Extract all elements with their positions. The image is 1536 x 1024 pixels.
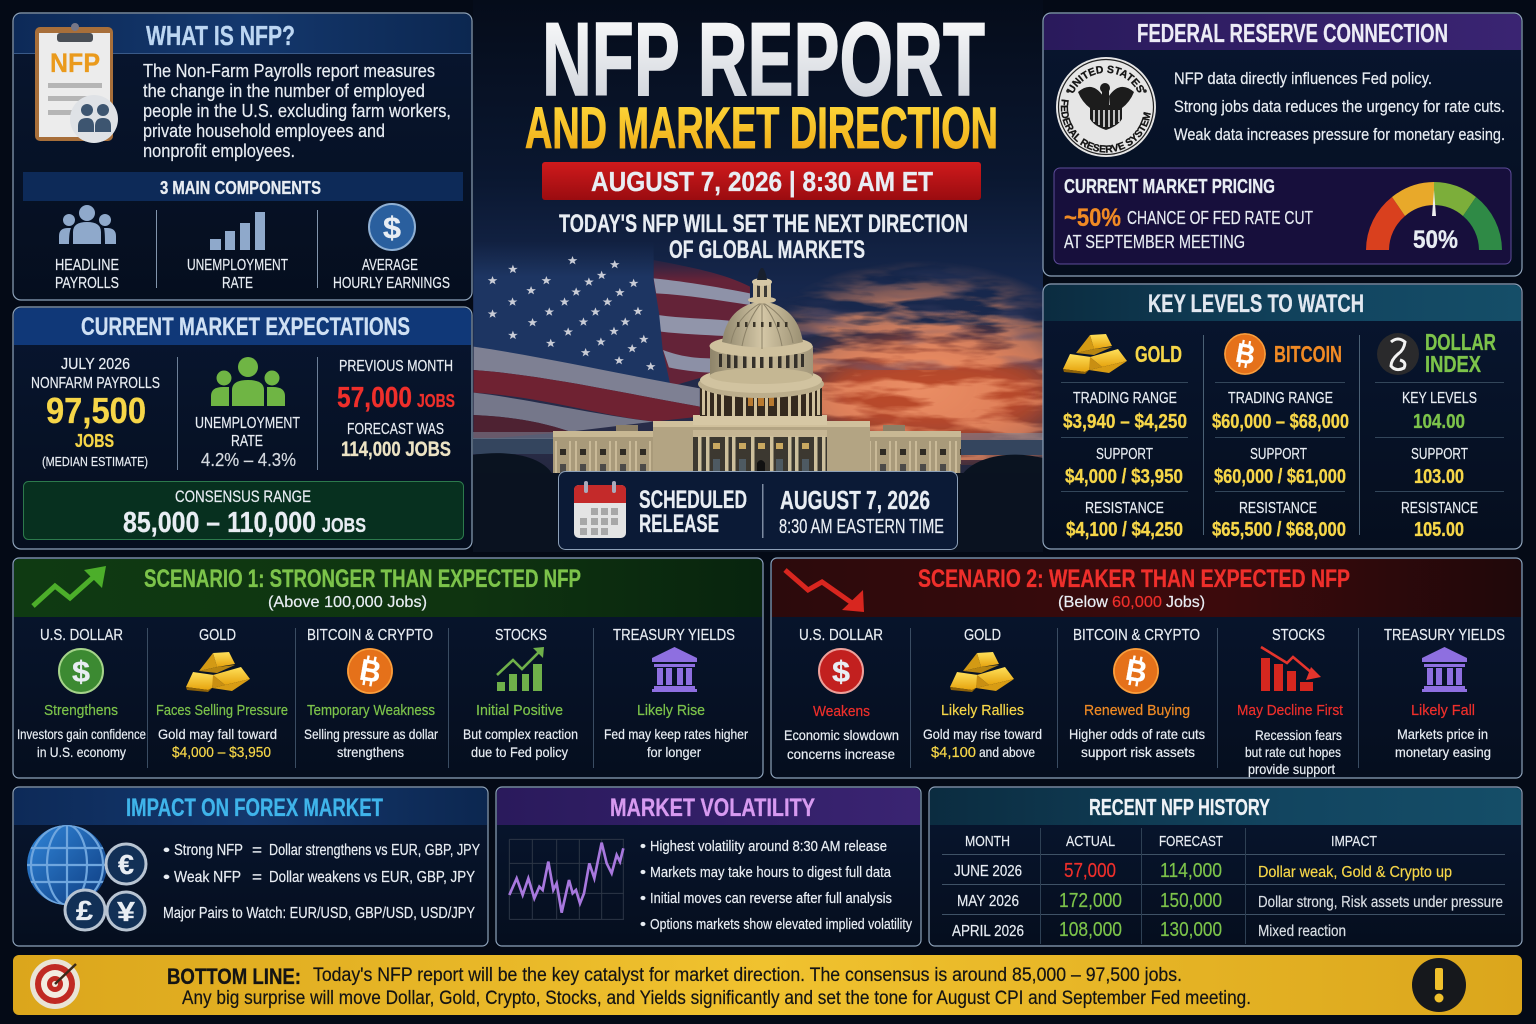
text: forex bullet points <box>163 842 480 922</box>
gauge: 50 percent: 50% <box>1413 226 1458 254</box>
column: gold levels: GOLD <box>1135 341 1182 367</box>
tagline: TODAY'S NFP WILL SET THE NEXT DIRECTION <box>559 210 968 238</box>
column: US dollar: concerns increase <box>787 746 895 762</box>
column: US dollar: Economic slowdown <box>784 727 899 743</box>
stat: previous month: FORECAST WAS <box>347 421 444 438</box>
icon: calendar <box>574 481 626 538</box>
icon: rising arrow <box>33 566 106 606</box>
icon: falling arrow <box>785 570 864 612</box>
panel: scenario 2 weaker than expected <box>771 558 1522 778</box>
row: April 2026 <box>952 919 1346 941</box>
stat: previous month: 114,000 JOBS <box>341 438 451 461</box>
bottom line text: Today's NFP report will be the key catalyst for market direction. The consensus is around 85,000 – 97,500 jobs. <box>313 965 1182 986</box>
text: forex bullet points: Dollar weakens vs EUR, GBP, JPY <box>269 869 475 886</box>
column: treasury yields: TREASURY YIELDS <box>613 627 735 644</box>
bottom line text: BOTTOM LINE: <box>167 964 301 989</box>
column: US dollar: Investors gain confidence <box>17 726 146 742</box>
column: treasury yields <box>604 627 748 760</box>
column: stocks: but rate cut hopes <box>1245 744 1341 760</box>
text: forex bullet points: Dollar strengthens vs EUR, GBP, JPY <box>269 842 480 859</box>
icon: Federal Reserve seal: UNITED STATES <box>1066 66 1144 93</box>
components heading <box>23 172 463 201</box>
components heading: 3 MAIN COMPONENTS <box>160 178 321 198</box>
table header: FORECAST <box>1159 833 1223 850</box>
column: US dollar: Weakens <box>813 703 870 720</box>
heading: SCENARIO 1: STRONGER THAN EXPECTED NFP <box>144 565 581 593</box>
column: dollar index levels: 103.00 <box>1414 466 1464 488</box>
icon: target <box>30 959 80 1009</box>
stat: July payrolls estimate: NONFARM PAYROLLS <box>31 375 160 392</box>
column: bitcoin and crypto: support risk assets <box>1081 744 1195 760</box>
text: volatility bullet points: • <box>640 890 646 907</box>
component: average hourly earnings: HOURLY EARNINGS <box>333 275 450 292</box>
row: April 2026: APRIL 2026 <box>952 923 1024 940</box>
text: volatility bullet points: • <box>640 838 646 855</box>
current market pricing box: AT SEPTEMBER MEETING <box>1064 232 1245 252</box>
panel: what is NFP <box>13 13 472 300</box>
column: bitcoin and crypto: BITCOIN & CRYPTO <box>307 627 433 644</box>
icon: globe with currencies: € <box>118 849 134 880</box>
column: treasury yields <box>1384 627 1505 760</box>
icon: Federal Reserve seal <box>1056 57 1156 157</box>
date banner: AUGUST 7, 2026 | 8:30 AM ET <box>591 166 933 197</box>
column: dollar index levels: RESISTANCE <box>1401 500 1478 517</box>
column: dollar index levels: 105.00 <box>1414 519 1464 541</box>
panel: recent NFP history <box>929 787 1522 946</box>
column: gold <box>923 627 1042 761</box>
description: private household employees and <box>143 121 385 141</box>
description <box>143 61 451 161</box>
release date and time <box>779 485 944 538</box>
stat: previous month: PREVIOUS MONTH <box>339 358 453 375</box>
column: dollar index levels: DOLLAR <box>1425 329 1496 355</box>
column: US dollar <box>784 627 899 762</box>
stat: July payrolls estimate <box>31 356 160 469</box>
current market pricing box: CHANCE OF FED RATE CUT <box>1127 208 1313 228</box>
release date and time: AUGUST 7, 2026 <box>780 485 930 515</box>
column: treasury yields: Markets price in <box>1397 726 1488 742</box>
line chart: volatility <box>509 839 624 919</box>
row: April 2026: 130,000 <box>1160 919 1222 941</box>
stat: unemployment rate <box>195 357 300 470</box>
column: dollar index levels: SUPPORT <box>1411 446 1468 463</box>
text: forex bullet points: Weak NFP <box>174 869 241 886</box>
column: gold: Faces Selling Pressure <box>156 702 288 719</box>
column: gold levels: RESISTANCE <box>1085 500 1164 517</box>
column: dollar index levels: 104.00 <box>1413 411 1465 433</box>
column: bitcoin and crypto <box>1069 627 1205 760</box>
column: stocks <box>1237 627 1344 777</box>
column: gold: Gold may rise toward <box>923 726 1042 742</box>
icon: exclamation <box>1412 958 1466 1012</box>
stat: previous month: JOBS <box>417 391 455 411</box>
heading: (Above 100,000 Jobs) <box>268 594 427 611</box>
icon: globe with currencies <box>27 825 146 930</box>
column: stocks: due to Fed policy <box>471 744 568 760</box>
panel: scenario 1 stronger than expected <box>13 558 763 778</box>
text: volatility bullet points <box>640 838 912 933</box>
heading: RECENT NFP HISTORY <box>1089 794 1270 820</box>
column: gold levels: $3,940 – $4,250 <box>1063 411 1187 433</box>
column: bitcoin levels <box>1212 333 1349 541</box>
column: gold levels: SUPPORT <box>1096 446 1153 463</box>
column: bitcoin levels: BITCOIN <box>1274 341 1342 367</box>
row: June 2026: 114,000 <box>1160 860 1222 882</box>
stat: unemployment rate: UNEMPLOYMENT <box>195 415 300 432</box>
column: gold levels <box>1063 334 1187 541</box>
text: forex bullet points: • <box>163 842 170 859</box>
consensus range box: JOBS <box>322 515 366 537</box>
heading <box>144 565 581 611</box>
stat: unemployment rate: 4.2% – 4.3% <box>201 450 296 470</box>
stat: July payrolls estimate: 97,500 <box>46 390 146 431</box>
row: April 2026: 108,000 <box>1059 919 1122 941</box>
row: June 2026: JUNE 2026 <box>954 863 1022 880</box>
column: gold: GOLD <box>199 627 236 644</box>
column: gold: $4,100 <box>931 745 976 761</box>
panel: federal reserve connection <box>1042 12 1523 277</box>
column: stocks <box>463 627 578 760</box>
gauge: 50 percent <box>1366 182 1502 254</box>
column: bitcoin and crypto: Temporary Weakness <box>307 702 435 719</box>
icon: clipboard <box>35 23 118 143</box>
bottom line text <box>167 964 1251 1009</box>
panel: bottom line banner <box>13 955 1522 1015</box>
heading: CURRENT MARKET EXPECTATIONS <box>81 313 410 341</box>
column: stocks: May Decline First <box>1237 702 1344 719</box>
column: dollar index levels <box>1377 329 1496 541</box>
column: gold: and above <box>979 744 1035 760</box>
component: headline payrolls <box>55 205 119 292</box>
bottom line text: Any big surprise will move Dollar, Gold, Crypto, Stocks, and Yields significantly and set the tone for August CPI and September Fed meeting. <box>182 988 1251 1009</box>
column: dollar index levels: INDEX <box>1425 351 1482 377</box>
panel: market volatility <box>496 787 921 946</box>
text: fed policy points: NFP data directly influences Fed policy. <box>1174 69 1432 88</box>
heading: 60,000 <box>1112 594 1162 611</box>
description: The Non-Farm Payrolls report measures <box>143 61 435 81</box>
column: treasury yields: monetary easing <box>1395 744 1491 760</box>
column: treasury yields: Likely Fall <box>1411 702 1475 719</box>
column: US dollar: U.S. DOLLAR <box>40 627 123 644</box>
column: stocks: provide support <box>1248 761 1335 777</box>
icon: clipboard: NFP <box>50 48 100 78</box>
label: scheduled release: SCHEDULED <box>639 486 747 514</box>
text: volatility bullet points: Markets may take hours to digest full data <box>650 864 892 881</box>
table header <box>965 833 1377 850</box>
column: bitcoin and crypto: Selling pressure as dollar <box>304 726 438 742</box>
stat: July payrolls estimate: JOBS <box>75 431 114 451</box>
stat: July payrolls estimate: JULY 2026 <box>61 356 130 373</box>
component: unemployment rate: RATE <box>222 275 253 292</box>
row: June 2026: Dollar weak, Gold & Crypto up <box>1258 864 1452 881</box>
text: forex bullet points: Strong NFP <box>174 842 243 859</box>
text: forex bullet points: Major Pairs to Watch: EUR/USD, GBP/USD, USD/JPY <box>163 905 475 922</box>
table header: MONTH <box>965 833 1010 850</box>
row: May 2026 <box>957 890 1503 912</box>
release date and time: 8:30 AM EASTERN TIME <box>779 516 944 538</box>
row: May 2026: 150,000 <box>1160 890 1222 912</box>
column: bitcoin levels: $60,000 / $61,000 <box>1214 466 1346 488</box>
description: the change in the number of employed <box>143 81 425 101</box>
column: stocks: STOCKS <box>1272 627 1325 644</box>
column: US dollar: $ <box>72 656 90 689</box>
column: treasury yields: Likely Rise <box>637 702 705 719</box>
subtitle: AND MARKET DIRECTION <box>525 96 998 161</box>
scheduled release box <box>558 472 958 550</box>
row: May 2026: Dollar strong, Risk assets under pressure <box>1258 894 1503 911</box>
tagline: OF GLOBAL MARKETS <box>669 236 865 264</box>
component: headline payrolls: HEADLINE <box>55 257 119 274</box>
column: gold: Likely Rallies <box>941 702 1024 719</box>
heading: IMPACT ON FOREX MARKET <box>126 794 383 822</box>
column: bitcoin levels: RESISTANCE <box>1239 500 1317 517</box>
component: unemployment rate <box>187 212 288 292</box>
component: average hourly earnings: AVERAGE <box>362 257 418 274</box>
component: unemployment rate: UNEMPLOYMENT <box>187 257 288 274</box>
text: volatility bullet points: Options markets show elevated implied volatility <box>650 916 912 933</box>
row: May 2026: MAY 2026 <box>957 893 1019 910</box>
tagline <box>559 210 968 264</box>
column: bitcoin and crypto: Renewed Buying <box>1084 702 1190 719</box>
column: treasury yields: TREASURY YIELDS <box>1384 627 1505 644</box>
column: bitcoin levels: $65,500 / $68,000 <box>1212 519 1346 541</box>
column: bitcoin and crypto: BITCOIN & CRYPTO <box>1073 627 1200 644</box>
text: volatility bullet points: • <box>640 916 646 933</box>
text: forex bullet points: • <box>163 869 170 886</box>
component: average hourly earnings <box>333 204 450 292</box>
column: bitcoin levels: $60,000 – $68,000 <box>1212 411 1349 433</box>
column: US dollar <box>17 627 146 760</box>
current market pricing box: ~50% <box>1064 204 1121 232</box>
text: forex bullet points: = <box>252 869 262 886</box>
table header: ACTUAL <box>1066 833 1115 850</box>
column: US dollar: in U.S. economy <box>37 744 126 760</box>
hero illustration: flag and Capitol at sunset <box>473 0 1065 553</box>
column: gold levels: $4,100 / $4,250 <box>1066 519 1183 541</box>
column: dollar index levels: KEY LEVELS <box>1402 390 1477 407</box>
stat: unemployment rate: RATE <box>231 433 263 450</box>
consensus range box <box>24 482 464 540</box>
heading: KEY LEVELS TO WATCH <box>1148 290 1364 318</box>
column: US dollar: U.S. DOLLAR <box>799 627 883 644</box>
heading: (Below <box>1058 594 1108 611</box>
label: scheduled release <box>639 486 747 538</box>
icon: globe with currencies: £ <box>76 895 93 926</box>
column: bitcoin and crypto: strengthens <box>337 744 404 760</box>
column: stocks: Initial Positive <box>476 702 563 719</box>
column: treasury yields: for longer <box>647 744 701 760</box>
panel: key levels to watch <box>1043 284 1522 549</box>
text: forex bullet points: = <box>252 842 262 859</box>
column: bitcoin and crypto <box>304 627 438 760</box>
current market pricing box <box>1054 168 1511 264</box>
stat: previous month <box>337 358 455 461</box>
icon: Federal Reserve seal: FEDERAL RESERVE SYSTEM <box>1060 99 1151 153</box>
label: scheduled release: RELEASE <box>639 510 719 538</box>
column: gold: GOLD <box>964 627 1001 644</box>
consensus range box: 85,000 – 110,000 <box>123 507 316 539</box>
heading: MARKET VOLATILITY <box>610 794 815 822</box>
main title: NFP REPORT <box>542 2 985 118</box>
component: headline payrolls: PAYROLLS <box>55 275 119 292</box>
description: nonprofit employees. <box>143 141 295 161</box>
heading <box>918 565 1350 611</box>
column: stocks: But complex reaction <box>463 726 578 742</box>
current market pricing box: CURRENT MARKET PRICING <box>1064 176 1275 198</box>
heading: WHAT IS NFP? <box>146 20 295 51</box>
icon: globe with currencies: ¥ <box>117 896 135 927</box>
description: people in the U.S. excluding farm workers, <box>143 101 451 121</box>
column: stocks: STOCKS <box>495 627 547 644</box>
text: fed policy points <box>1174 69 1505 144</box>
panel: current market expectations <box>13 307 472 549</box>
stat: July payrolls estimate: (MEDIAN ESTIMATE) <box>42 454 148 469</box>
heading: SCENARIO 2: WEAKER THAN EXPECTED NFP <box>918 565 1350 593</box>
table header: IMPACT <box>1331 833 1377 850</box>
column: bitcoin and crypto: Higher odds of rate cuts <box>1069 726 1205 742</box>
column: bitcoin levels: TRADING RANGE <box>1228 390 1333 407</box>
column: gold levels: TRADING RANGE <box>1073 390 1177 407</box>
column: bitcoin levels: SUPPORT <box>1250 446 1307 463</box>
column: gold: Gold may fall toward <box>158 726 277 742</box>
row: April 2026: Mixed reaction <box>1258 923 1346 940</box>
row: June 2026: 57,000 <box>1064 860 1116 882</box>
stat: previous month: 57,000 <box>337 382 412 414</box>
heading: Jobs) <box>1166 594 1205 611</box>
text: volatility bullet points: Highest volatility around 8:30 AM release <box>650 838 887 855</box>
column: treasury yields: Fed may keep rates higher <box>604 726 748 742</box>
row: May 2026: 172,000 <box>1059 890 1122 912</box>
column: gold levels: $4,000 / $3,950 <box>1065 466 1183 488</box>
column: US dollar: Strengthens <box>44 702 118 719</box>
column: gold: $4,000 – $3,950 <box>172 745 271 761</box>
panel: impact on forex market <box>13 787 488 946</box>
column: gold <box>156 627 288 761</box>
component: average hourly earnings: $ <box>383 210 401 245</box>
consensus range box: CONSENSUS RANGE <box>175 487 311 506</box>
column: US dollar: $ <box>832 656 850 689</box>
text: volatility bullet points: • <box>640 864 646 881</box>
text: volatility bullet points: Initial moves can reverse after full analysis <box>650 890 892 907</box>
row: June 2026 <box>954 860 1452 882</box>
column: stocks: Recession fears <box>1255 727 1342 743</box>
